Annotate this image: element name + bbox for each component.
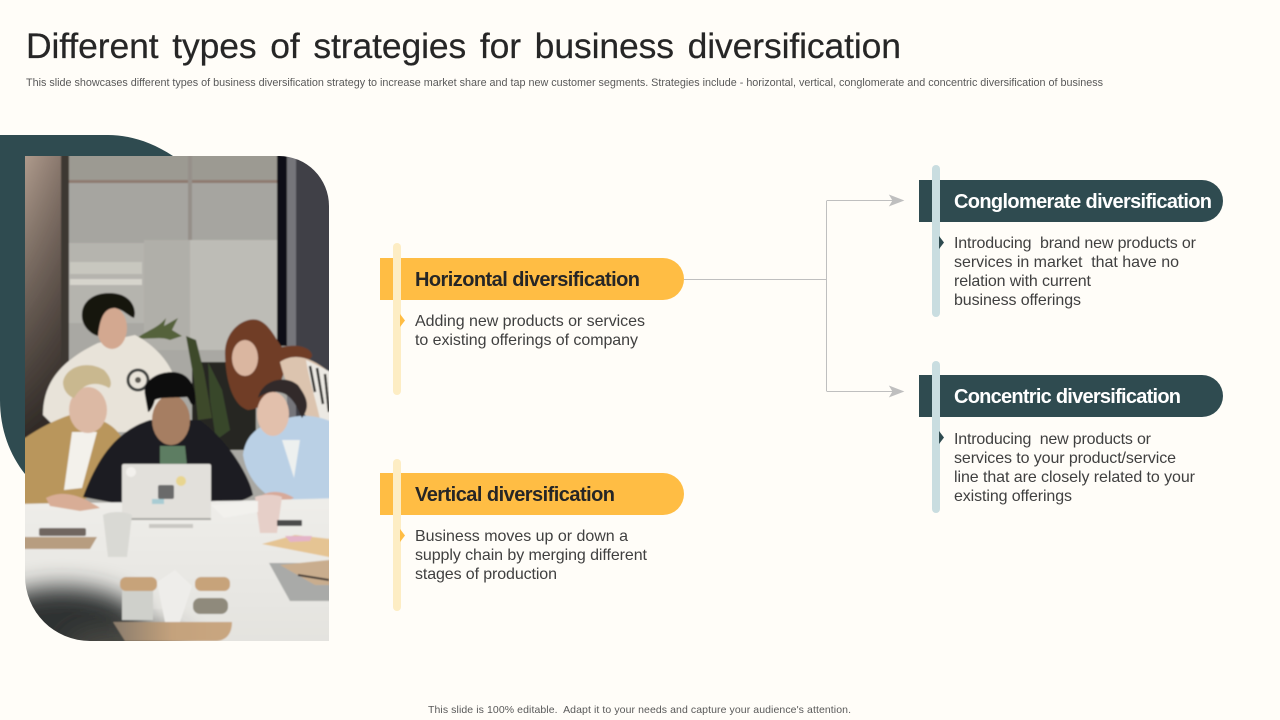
bullet marker <box>400 314 405 327</box>
heading: Vertical diversification <box>415 484 615 506</box>
description: services in market that have no <box>954 254 1179 271</box>
woman red hair <box>224 318 329 422</box>
table objects <box>103 512 132 557</box>
panel: conglomerate diversification <box>919 165 1223 317</box>
panel: horizontal diversification <box>380 243 684 395</box>
vertical accent <box>393 243 401 395</box>
title: Different types of strategies for business diversification <box>26 26 901 66</box>
description: relation with current <box>954 273 1092 290</box>
man back <box>43 293 172 432</box>
heading: Horizontal diversification <box>415 269 640 291</box>
header bar <box>380 473 684 515</box>
subtitle: This slide showcases different types of business diversification strategy to increase market share and tap new customer segments. Strategies include - horizontal, vertical, conglomerate and concentric diversification of business <box>26 77 1104 89</box>
description: Adding new products or services <box>415 313 645 330</box>
team photo <box>25 156 329 641</box>
bullet marker <box>939 431 944 444</box>
panel: concentric diversification <box>919 361 1223 513</box>
teal backdrop shape <box>0 135 173 474</box>
heading: Conglomerate diversification <box>954 191 1212 213</box>
description: stages of production <box>415 566 557 583</box>
vertical accent <box>393 459 401 611</box>
heading: Concentric diversification <box>954 386 1181 408</box>
header bar <box>919 375 1223 417</box>
description: Introducing new products or <box>954 431 1152 448</box>
laptop <box>122 464 211 528</box>
header bar <box>380 258 684 300</box>
vertical accent <box>932 361 940 513</box>
bullet marker <box>400 529 405 542</box>
connector arrows <box>684 196 903 396</box>
plant <box>137 318 182 340</box>
description: services to your product/service <box>954 450 1176 467</box>
footer note: This slide is 100% editable. Adapt it to your needs and capture your audience's attention. <box>428 704 851 716</box>
woman right <box>242 378 329 500</box>
description: Introducing brand new products or <box>954 235 1197 252</box>
wall and window <box>25 156 62 430</box>
vertical accent <box>932 165 940 317</box>
man centre <box>83 372 253 505</box>
description: supply chain by merging different <box>415 547 648 564</box>
arrow: to conglomerate <box>827 196 903 206</box>
header bar <box>919 180 1223 222</box>
description: existing offerings <box>954 488 1072 505</box>
description: line that are closely related to your <box>954 469 1196 486</box>
arrow: to concentric <box>827 386 903 396</box>
panel: vertical diversification <box>380 459 684 611</box>
table <box>25 498 329 641</box>
description: business offerings <box>954 292 1081 309</box>
bullet marker <box>939 236 944 249</box>
dark foreground blur <box>0 587 142 663</box>
description: Business moves up or down a <box>415 528 628 545</box>
man left <box>25 364 122 504</box>
description: to existing offerings of company <box>415 332 638 349</box>
